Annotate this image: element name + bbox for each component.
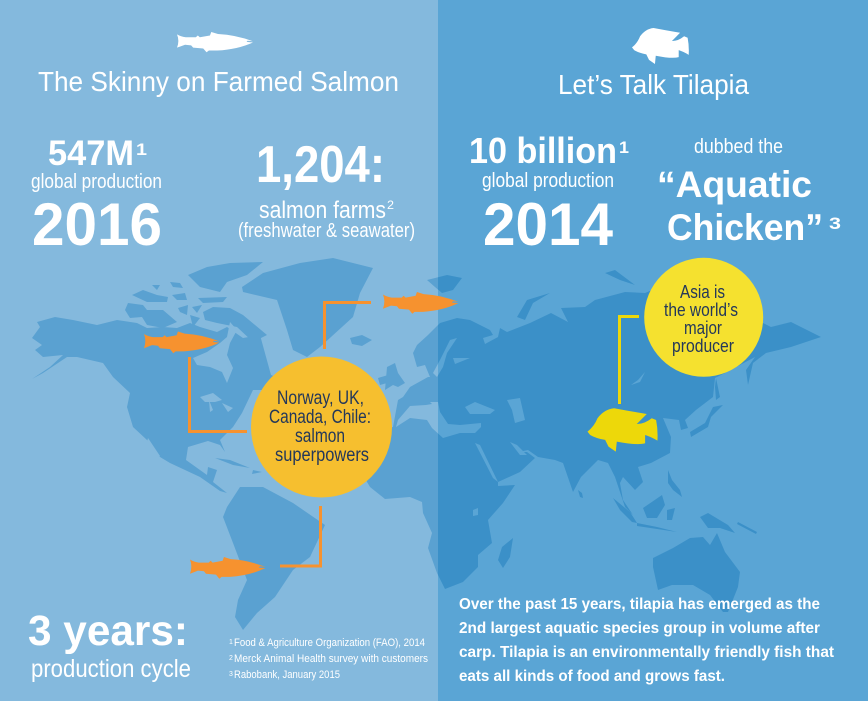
callout: salmon superpowers: Canada, Chile:: [269, 407, 371, 428]
stat: 3 years production cycle: 3 years:: [28, 607, 188, 655]
footnotes: Rabobank, January 2015: [234, 669, 340, 681]
icon: orange salmon Canada: [144, 332, 219, 353]
text block: tilapia summary: Over the past 15 years, tilapia has emerged as the: [459, 596, 820, 613]
stat: 547M global production 2016: global production: [31, 171, 162, 193]
stat: Aquatic Chicken: dubbed the: [694, 136, 783, 158]
stat: 1,204 salmon farms: [238, 136, 415, 242]
stat: Aquatic Chicken: 3: [829, 214, 841, 233]
icon: orange salmon Norway: [383, 292, 458, 314]
connector: Chile: [280, 506, 320, 566]
callout: Asia major producer: producer: [672, 336, 734, 356]
callout: salmon superpowers: Norway, UK,: [277, 388, 364, 409]
stat: Aquatic Chicken: Chicken”: [667, 207, 823, 248]
icon: white salmon: [177, 32, 253, 52]
callout: Asia major producer: major: [684, 318, 722, 338]
stat: 3 years production cycle: production cycle: [31, 655, 191, 683]
stat: 547M global production 2016: [31, 134, 162, 258]
connector: Norway: [324, 302, 371, 349]
callout: Asia major producer: [644, 258, 763, 377]
stat: 1,204 salmon farms: salmon farms: [259, 197, 386, 224]
callout: Asia major producer: Asia is: [680, 282, 725, 302]
stat: 1,204 salmon farms: (freshwater & seawater): [238, 220, 415, 242]
text block: tilapia summary: eats all kinds of food and grows fast.: [459, 668, 725, 685]
panel: tilapia background: [438, 0, 868, 701]
stat: 10 billion global production 2014: 1: [619, 138, 629, 157]
footnotes: 1: [229, 639, 233, 646]
stat: 10 billion global production 2014: [469, 130, 629, 258]
stat: Aquatic Chicken: [657, 136, 841, 248]
panel: salmon background: [0, 0, 438, 701]
callout: salmon superpowers: [251, 356, 392, 498]
text block: tilapia summary: carp. Tilapia is an environmentally friendly fish that: [459, 644, 835, 661]
footnotes: Food & Agriculture Organization (FAO), 2014: [234, 637, 425, 649]
stat: 1,204 salmon farms: 2: [387, 198, 394, 212]
callout: salmon superpowers: salmon: [295, 426, 345, 447]
connector: Asia: [620, 316, 639, 404]
stat: 10 billion global production 2014: 2014: [483, 191, 614, 258]
footnotes: 3: [229, 671, 233, 678]
heading: salmon: The Skinny on Farmed Salmon: [38, 66, 399, 97]
world map: [32, 258, 821, 630]
stat: 3 years production cycle: [28, 607, 191, 683]
text block: tilapia summary: 2nd largest aquatic species group in volume after: [459, 620, 820, 637]
stat: 547M global production 2016: 547M: [48, 134, 134, 173]
stat: 10 billion global production 2014: global production: [482, 170, 614, 192]
callout: Asia major producer: the world’s: [664, 300, 738, 320]
footnotes: Merck Animal Health survey with customers: [234, 653, 428, 665]
connector: Canada: [190, 357, 247, 432]
callout: salmon superpowers: superpowers: [275, 445, 369, 466]
stat: 1,204 salmon farms: 1,204:: [256, 136, 385, 194]
stat: 10 billion global production 2014: 10 billion: [469, 130, 617, 171]
footnotes: 2: [229, 655, 233, 662]
stat: 547M global production 2016: 2016: [32, 191, 162, 258]
icon: yellow tilapia: [588, 408, 658, 452]
stat: 547M global production 2016: 1: [136, 140, 147, 159]
icon: orange salmon Chile: [190, 557, 265, 579]
text block: tilapia summary: [459, 596, 835, 685]
icon: white tilapia: [632, 28, 689, 64]
footnotes: [229, 637, 428, 681]
heading: tilapia: Let’s Talk Tilapia: [558, 69, 749, 100]
stat: Aquatic Chicken: “Aquatic: [657, 164, 812, 205]
